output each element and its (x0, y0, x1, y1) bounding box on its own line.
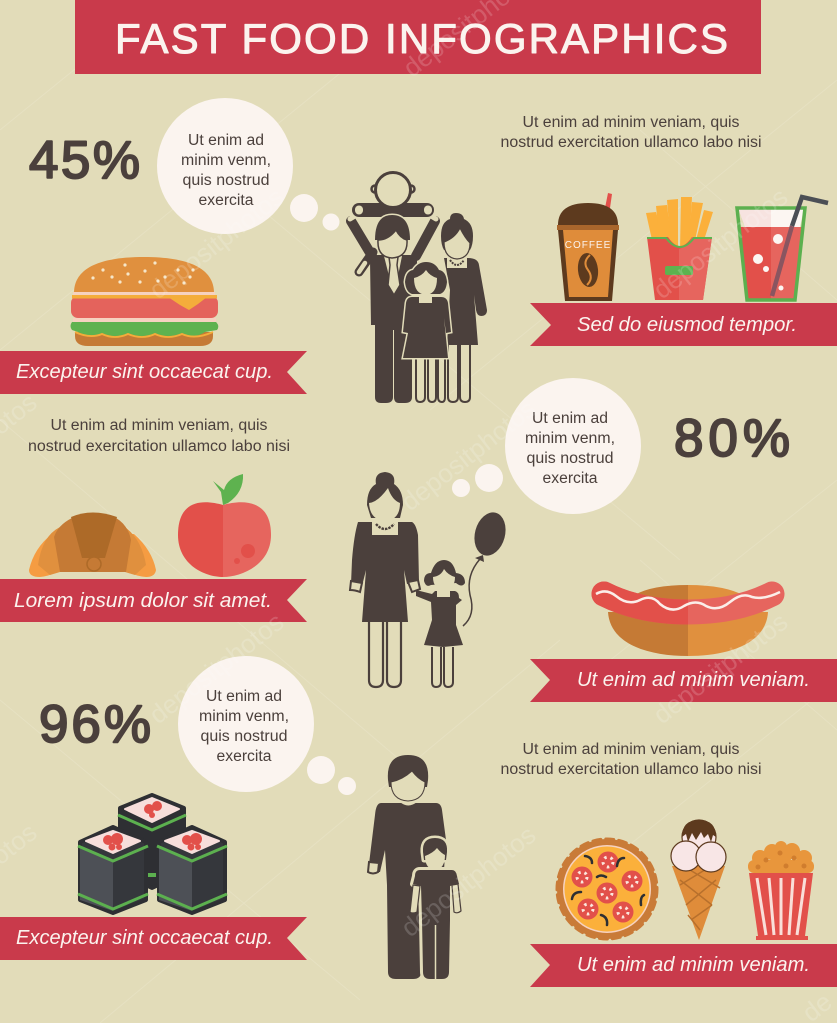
daughter (416, 560, 465, 687)
text block: top right: nostrud exercitation ullamco labo nisi (500, 134, 762, 151)
mother (350, 472, 420, 687)
ribbon: hot dog: Ut enim ad minim veniam. (577, 669, 810, 691)
watermark text: depositphotos (647, 606, 793, 730)
text block: middle left: Ut enim ad minim veniam, quis (50, 417, 268, 434)
text block: middle left: nostrud exercitation ullamco labo nisi (28, 438, 290, 455)
ribbon: hot dog (530, 659, 837, 702)
icon: burger (70, 257, 218, 346)
thought bubble 2: Ut enim ad (532, 410, 608, 427)
stat: 80 percent: 80% (674, 409, 790, 468)
icon: coffee cup: COFFEE (565, 240, 611, 251)
ribbon: snacks (530, 944, 837, 987)
thought bubble 3: quis nostrud (200, 728, 288, 745)
father (368, 755, 446, 979)
watermark text: depositphotos (647, 181, 793, 305)
icon: coffee cup (557, 193, 619, 301)
icon: father and son (368, 755, 461, 980)
thought bubble 2: quis nostrud (526, 450, 614, 467)
thought bubble 2: minim venm, (525, 430, 615, 447)
icon: family with baby (350, 172, 487, 403)
left roll (78, 827, 148, 913)
thought bubble 2 (452, 378, 641, 514)
back roll (118, 795, 186, 888)
icon: popcorn bucket (748, 841, 814, 940)
icon: ice cream cone (671, 820, 726, 940)
baby (352, 172, 434, 217)
thought bubble 3: exercita (216, 748, 272, 765)
text block: middle left (28, 417, 290, 455)
text block: bottom right (500, 741, 762, 778)
father (359, 215, 417, 403)
ribbon: sushi: Excepteur sint occaecat cup. (16, 927, 273, 949)
title: FAST FOOD INFOGRAPHICS (115, 15, 728, 62)
thought bubble 2: exercita (542, 470, 598, 487)
thought bubble 3 (178, 656, 356, 795)
icon: hot dog (596, 585, 780, 656)
text block: bottom right: nostrud exercitation ullamco labo nisi (500, 761, 762, 778)
mother (437, 213, 487, 402)
thought bubble 1: exercita (198, 192, 254, 209)
text block: bottom right: Ut enim ad minim veniam, quis (522, 741, 740, 758)
thought bubble 1: quis nostrud (182, 172, 270, 189)
icon: apple (178, 474, 271, 577)
ribbon: snacks: Ut enim ad minim veniam. (577, 954, 810, 976)
balloon (463, 509, 510, 626)
stat: 45 percent: 45% (29, 131, 140, 190)
text block: top right: Ut enim ad minim veniam, quis (522, 114, 740, 131)
text block: top right (500, 114, 762, 151)
thought bubble 3: Ut enim ad (206, 688, 282, 705)
ribbon: burger (0, 351, 307, 394)
ribbon: sushi (0, 917, 307, 960)
ribbon: bakery (0, 579, 307, 622)
watermark text: depositphotos (395, 819, 541, 943)
ribbon: drinks: Sed do eiusmod tempor. (577, 314, 797, 336)
icon: croissant (29, 512, 156, 577)
son (410, 838, 461, 980)
icon: mother and daughter with balloon (350, 472, 510, 687)
ribbon: bakery: Lorem ipsum dolor sit amet. (14, 590, 272, 612)
watermark text: depositphotos (143, 181, 289, 305)
title banner (75, 0, 761, 74)
ribbon: burger: Excepteur sint occaecat cup. (16, 361, 273, 383)
ribbon: drinks (530, 303, 837, 346)
watermark text: depositphotos (395, 393, 541, 517)
icon: soda glass (737, 197, 828, 300)
girl (403, 262, 451, 402)
icon: sushi rolls (78, 795, 227, 913)
icon: pizza (557, 839, 657, 939)
thought bubble 1: minim venm, (181, 152, 271, 169)
thought bubble 1 (157, 98, 340, 234)
father's raised arms (350, 216, 436, 256)
thought bubble 3: minim venm, (199, 708, 289, 725)
thought bubble 1: Ut enim ad (188, 132, 264, 149)
icon: french fries (646, 197, 713, 300)
stat: 96 percent: 96% (39, 695, 151, 754)
watermark text: depositphotos (143, 606, 289, 730)
right roll (157, 827, 227, 913)
